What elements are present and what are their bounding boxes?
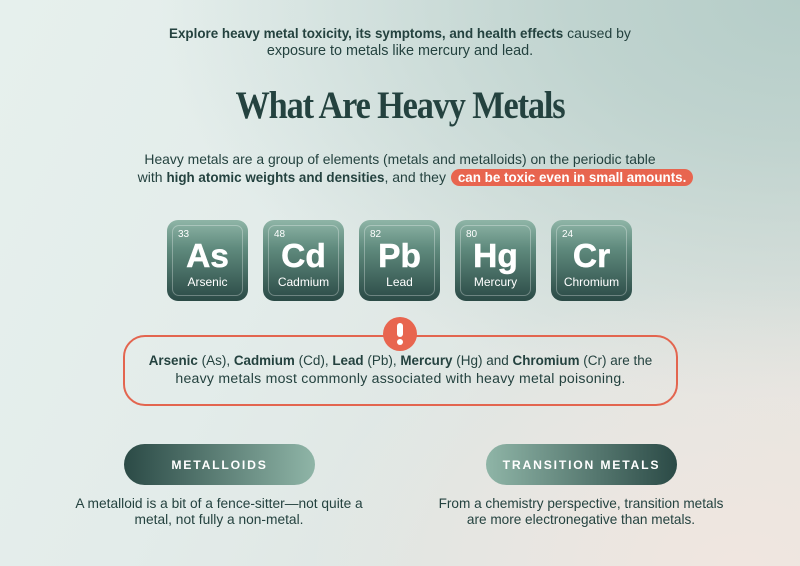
description text	[138, 151, 693, 186]
metalloids text: A metalloid is a bit of a fence-sitter—not quite a	[75, 496, 363, 511]
intro text: Explore heavy metal toxicity, its symptoms, and health effects caused by	[169, 25, 631, 41]
tile: cadmium: Cd	[281, 238, 326, 275]
description text: Heavy metals are a group of elements (metals and metalloids) on the periodic table	[144, 151, 656, 167]
tile: chromium: Chromium	[564, 275, 619, 289]
transition metals text	[439, 496, 723, 527]
element tiles	[167, 220, 632, 301]
tile: lead: Pb	[378, 238, 421, 275]
tile: lead	[359, 220, 440, 301]
description text: with high atomic weights and densities, and they can be toxic even in small amounts.	[138, 168, 686, 184]
tile: mercury	[455, 220, 536, 301]
tile: lead: 82	[370, 229, 381, 240]
tile: arsenic: 33	[178, 229, 189, 240]
tile: mercury: 80	[466, 229, 477, 240]
tile: arsenic	[167, 220, 248, 301]
pill: transition metals	[486, 444, 677, 485]
transition metals text: From a chemistry perspective, transition metals	[439, 496, 723, 511]
metalloids text	[75, 496, 363, 527]
tile: cadmium	[263, 220, 344, 301]
intro text	[169, 25, 631, 58]
tile: cadmium: 48	[274, 229, 285, 240]
callout	[123, 335, 678, 406]
pill: metalloids: METALLOIDS	[171, 458, 268, 472]
callout text: heavy metals most commonly associated with heavy metal poisoning.	[175, 370, 626, 386]
tile: mercury: Hg	[473, 238, 518, 275]
tile: cadmium: Cadmium	[278, 275, 329, 289]
tile: mercury: Mercury	[474, 275, 517, 289]
tile: chromium: 24	[562, 229, 573, 240]
tile: arsenic: As	[186, 238, 229, 275]
tile: chromium: Cr	[573, 238, 610, 275]
title: What Are Heavy Metals	[236, 84, 564, 127]
metalloids text: metal, not fully a non-metal.	[135, 512, 303, 527]
tile: chromium	[551, 220, 632, 301]
callout text	[149, 353, 652, 386]
tile: arsenic: Arsenic	[187, 275, 228, 289]
tile: lead: Lead	[386, 275, 413, 289]
transition metals text: are more electronegative than metals.	[467, 512, 695, 527]
icon: warning	[383, 317, 417, 351]
callout text: Arsenic (As), Cadmium (Cd), Lead (Pb), Mercury (Hg) and Chromium (Cr) are the	[149, 353, 652, 368]
pill: metalloids	[124, 444, 315, 485]
pill: transition metals: TRANSITION METALS	[503, 458, 660, 472]
intro text: exposure to metals like mercury and lead.	[267, 42, 533, 58]
